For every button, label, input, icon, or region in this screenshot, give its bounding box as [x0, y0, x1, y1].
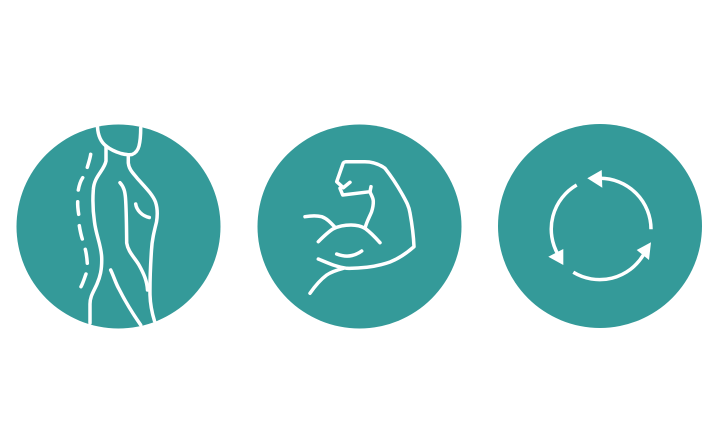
- arrow: bottom right: [573, 242, 651, 280]
- spine dashes: [87, 154, 91, 167]
- panel: cycle icon: [498, 124, 702, 328]
- teal circle: cycle: [498, 124, 702, 328]
- arrow: left: [548, 185, 577, 265]
- icon: flexed bicep arm: [305, 162, 414, 293]
- icon: three circular arrows: [548, 170, 651, 280]
- panel: muscle icon: [258, 124, 462, 328]
- teal circle: muscle: [258, 124, 462, 328]
- icon: human torso side profile: [78, 127, 157, 325]
- teal circle: posture: [16, 124, 220, 328]
- arrow: top right: [587, 170, 651, 229]
- panel: posture icon: [16, 124, 220, 328]
